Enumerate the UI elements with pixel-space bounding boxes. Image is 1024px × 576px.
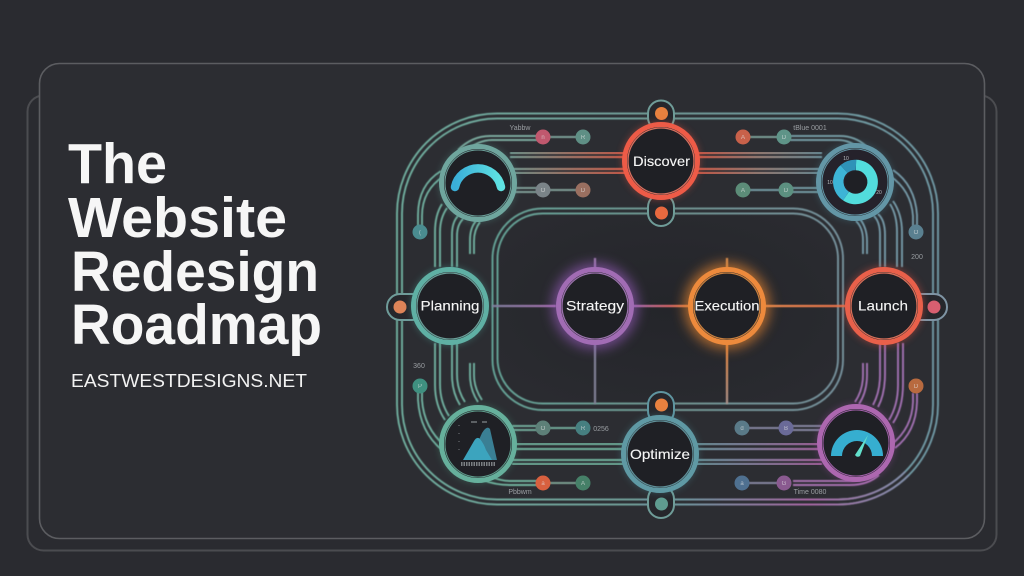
small nodes xyxy=(412,130,924,490)
small nodes: d xyxy=(740,426,744,432)
capsule: optimize bottom xyxy=(648,486,674,518)
node: optimize: Optimize xyxy=(630,446,690,462)
capsule: launch xyxy=(908,294,947,320)
node: top right donut: 20 xyxy=(876,190,882,196)
small nodes: R xyxy=(581,426,586,432)
tiny labels xyxy=(413,125,923,496)
node: top left gauge xyxy=(440,145,516,221)
icon: donut chart xyxy=(838,165,873,199)
roadmap diagram xyxy=(387,100,947,518)
small nodes: n xyxy=(541,135,545,141)
website url: EASTWESTDESIGNS.NET xyxy=(71,370,307,391)
small nodes: D xyxy=(782,135,787,141)
tiny labels: 0256 xyxy=(593,426,609,433)
node: top right donut: 10 xyxy=(827,180,833,186)
tiny labels: 360 xyxy=(413,363,425,370)
title: The xyxy=(68,132,167,196)
capsule: discover top xyxy=(648,100,674,130)
front panel xyxy=(40,64,984,538)
title: Roadmap xyxy=(71,293,322,357)
small nodes: ( xyxy=(419,230,421,236)
node: strategy xyxy=(552,263,638,349)
small nodes: O xyxy=(541,426,546,432)
node: launch: Launch xyxy=(858,298,908,314)
tiny labels: Pbbwm xyxy=(508,489,532,496)
tiny labels: tBlue 0001 xyxy=(793,125,827,132)
tiny labels: Time 0080 xyxy=(794,489,827,496)
small nodes: a xyxy=(541,481,545,487)
node: planning: Planning xyxy=(420,298,480,314)
icon: area chart xyxy=(459,422,497,465)
small nodes: G xyxy=(782,481,787,487)
title: Website xyxy=(68,186,287,250)
node: execution xyxy=(684,263,770,349)
icon: speedometer xyxy=(831,430,883,457)
node: top right donut: 10 xyxy=(843,156,849,162)
small nodes: B xyxy=(784,426,788,432)
node: bottom right gauge xyxy=(818,405,894,481)
icon: arc gauge xyxy=(455,168,501,187)
connector lines: bottom left to optimize xyxy=(512,444,625,464)
tiny labels: 200 xyxy=(911,254,923,261)
back panel outline xyxy=(28,96,996,550)
inner track xyxy=(492,208,843,410)
node: discover xyxy=(623,123,699,199)
connector lines: top left to discover xyxy=(510,153,630,173)
small nodes: A xyxy=(741,135,745,141)
node: planning xyxy=(412,268,488,344)
small nodes: A xyxy=(581,481,585,487)
outer track xyxy=(397,114,938,504)
small nodes: O xyxy=(541,188,546,194)
node: optimize xyxy=(622,416,698,492)
small nodes: D xyxy=(914,384,919,390)
small nodes: A xyxy=(741,188,745,194)
node: top right donut xyxy=(817,144,893,220)
small nodes: O xyxy=(914,230,919,236)
branch lines with small nodes xyxy=(458,136,879,485)
left branch lines xyxy=(418,171,482,450)
inner area shade xyxy=(497,213,838,403)
small nodes: D xyxy=(784,188,789,194)
tiny labels: Yabbw xyxy=(510,125,531,132)
node: bottom left chart xyxy=(440,406,516,482)
small nodes: R xyxy=(581,135,586,141)
capsule: optimize top xyxy=(648,392,674,424)
right branch lines xyxy=(856,170,917,267)
center row lines xyxy=(492,258,848,404)
capsule: discover bottom xyxy=(648,194,674,226)
small nodes: a xyxy=(740,481,744,487)
node: launch xyxy=(845,267,923,345)
connector lines: discover to top right xyxy=(695,153,822,173)
capsule: planning xyxy=(387,294,425,320)
small nodes: P xyxy=(418,384,422,390)
node: strategy: Strategy xyxy=(566,298,624,314)
small nodes: D xyxy=(581,188,586,194)
lower right branch lines xyxy=(855,343,917,448)
node: discover: Discover xyxy=(633,153,690,169)
node: execution: Execution xyxy=(694,298,760,314)
title: Redesign xyxy=(71,240,319,304)
connector lines: optimize to bottom right xyxy=(695,444,822,464)
